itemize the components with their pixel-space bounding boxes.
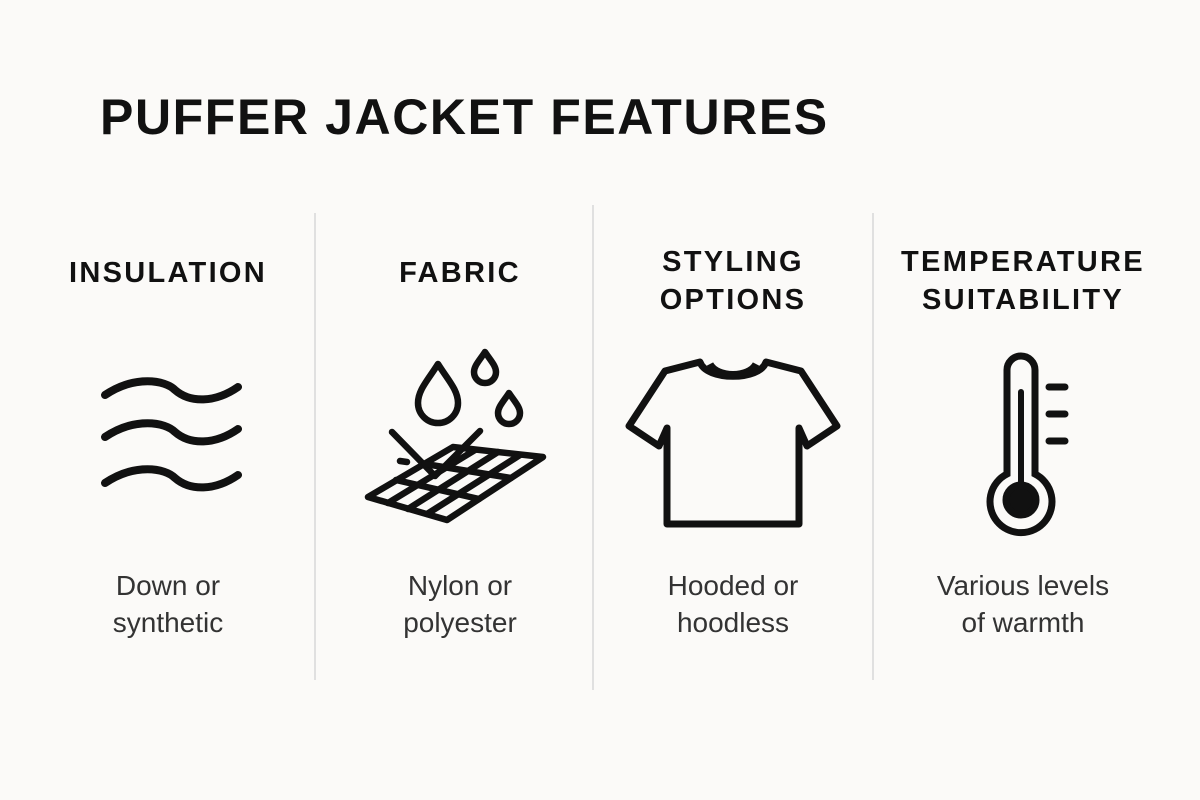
icon: waves	[101, 377, 242, 492]
text: insulation: Down or	[116, 570, 220, 601]
panel: temperature suitability	[901, 246, 1145, 638]
text: temperature	[937, 570, 1109, 638]
panel: fabric	[364, 257, 546, 638]
title: PUFFER JACKET FEATURES	[100, 89, 829, 145]
heading: styling options: OPTIONS	[660, 284, 806, 316]
text: insulation: synthetic	[113, 607, 223, 638]
heading: styling options: STYLING	[662, 246, 804, 278]
text: fabric: polyester	[403, 607, 517, 638]
heading: temperature	[901, 246, 1145, 316]
text: fabric: Nylon or	[408, 570, 512, 601]
heading: styling options	[660, 246, 806, 316]
text: styling options: Hooded or	[668, 570, 798, 601]
icon: water drops on fabric	[364, 348, 546, 524]
heading: temperature: SUITABILITY	[922, 284, 1124, 316]
panel: insulation	[69, 257, 267, 638]
icon: thermometer	[986, 352, 1068, 536]
icon: t-shirt	[626, 358, 840, 528]
text: fabric	[403, 570, 517, 638]
text: insulation	[113, 570, 223, 638]
text: styling options: hoodless	[677, 607, 789, 638]
heading: fabric: FABRIC	[399, 257, 521, 289]
text: temperature: Various levels	[937, 570, 1109, 601]
heading: insulation: INSULATION	[69, 257, 267, 289]
panel: styling options	[626, 246, 840, 638]
heading: temperature: TEMPERATURE	[901, 246, 1145, 278]
text: temperature: of warmth	[962, 607, 1084, 638]
text: styling options	[668, 570, 798, 638]
